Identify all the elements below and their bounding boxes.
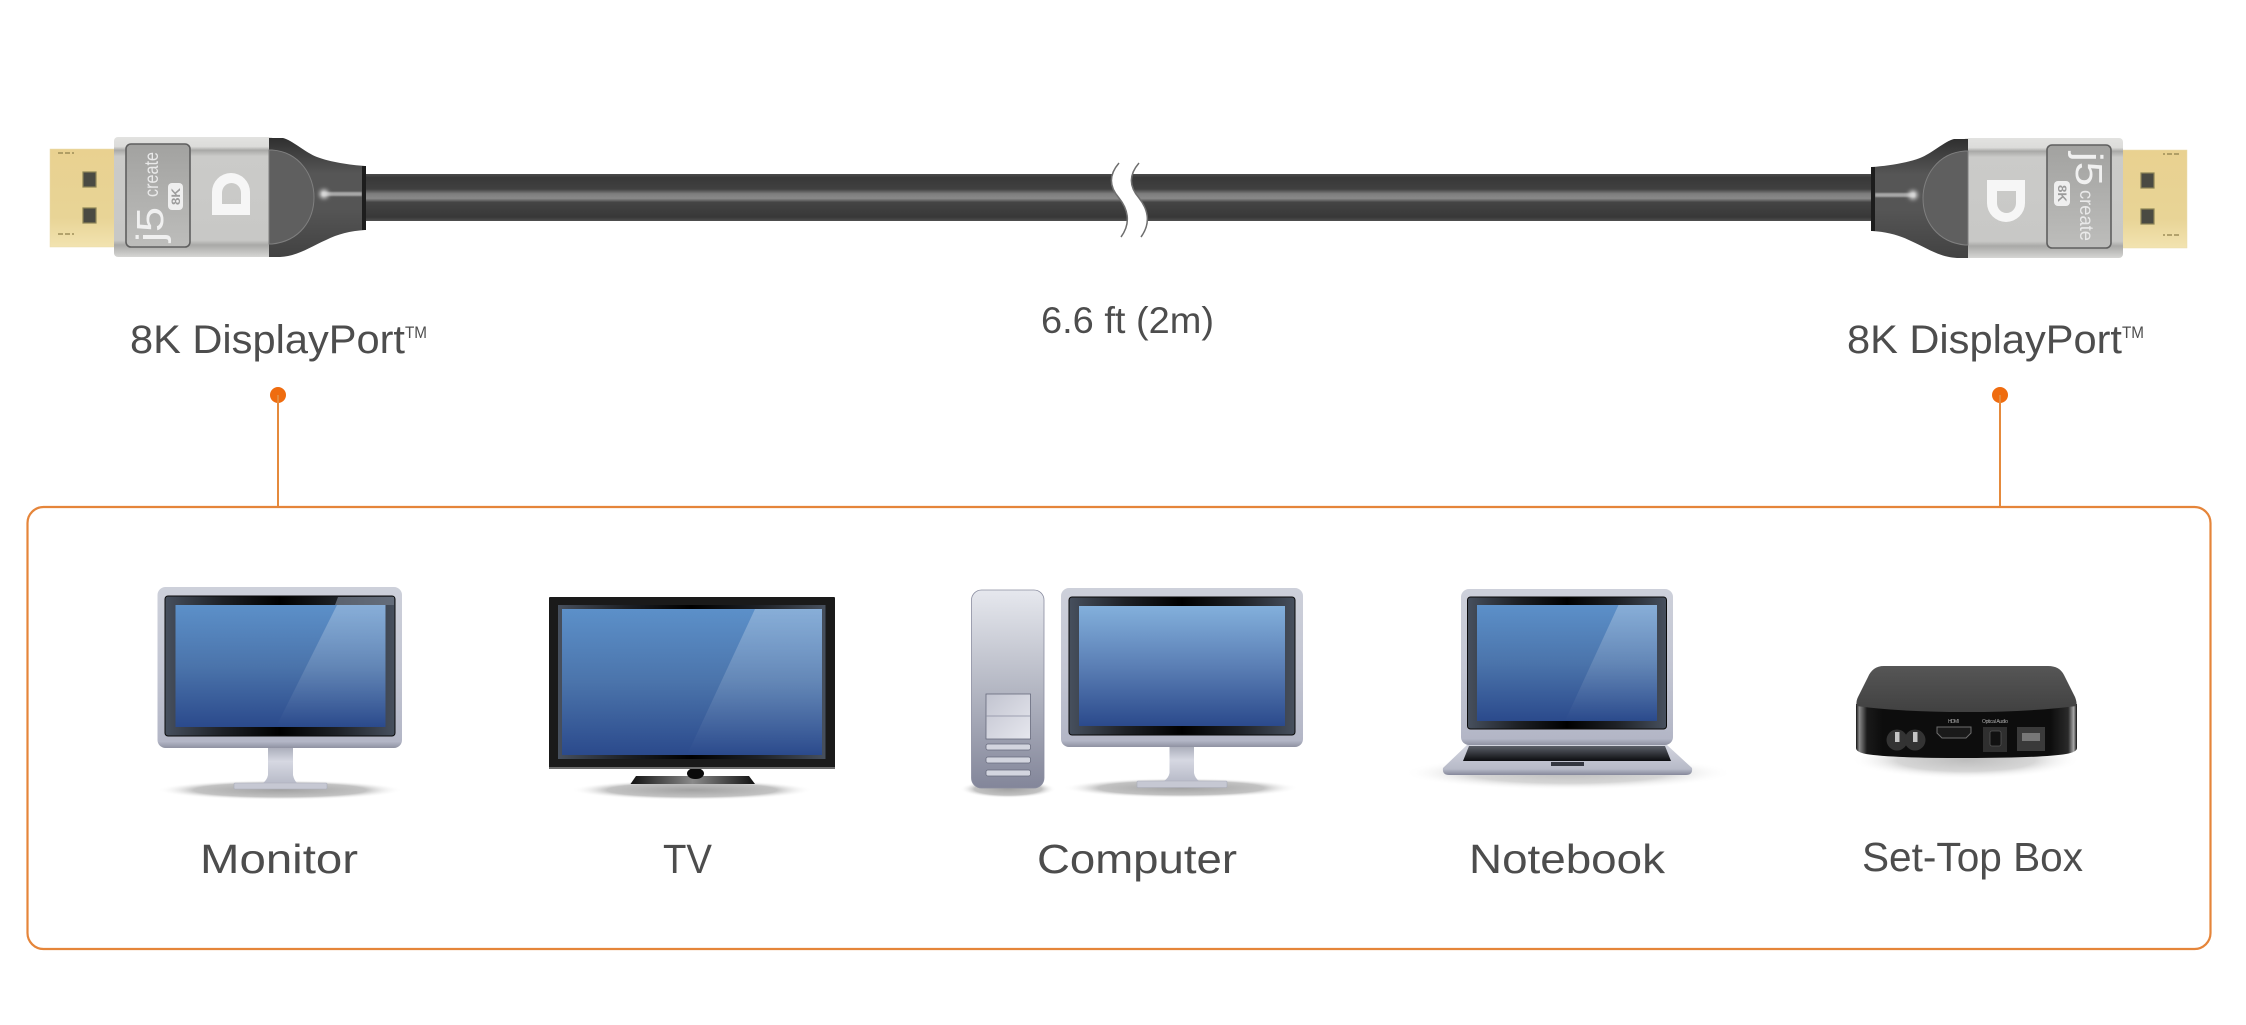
left logo text: j5	[130, 207, 172, 243]
label: set-top box: Set-Top Box	[1862, 834, 2083, 880]
left connector	[50, 137, 366, 257]
left logo text: 8K	[169, 188, 183, 205]
label: left port: TM	[405, 323, 427, 342]
label: right port: 8K DisplayPort	[1847, 318, 2122, 362]
connector: left dot and line	[270, 387, 286, 507]
connector: right dot and line	[1992, 387, 2008, 507]
right logo text: j5	[2067, 151, 2109, 186]
right connector	[1871, 138, 2187, 258]
label: left port: 8K DisplayPort	[130, 318, 405, 362]
box ports: Optical Audio	[1982, 719, 2008, 725]
cable	[360, 163, 1880, 237]
label: notebook: Notebook	[1469, 836, 1666, 882]
icon: set-top box	[1851, 666, 2081, 779]
left logo text	[130, 152, 183, 243]
icon: TV	[549, 597, 835, 800]
label: TV: TV	[663, 836, 713, 882]
label: monitor: Monitor	[200, 836, 358, 882]
icon: notebook	[1403, 589, 1733, 790]
right logo text: create	[2075, 190, 2096, 241]
tower	[960, 590, 1056, 798]
label: right port: TM	[2122, 323, 2144, 342]
label: cable length: 6.6 ft (2m)	[1041, 300, 1214, 341]
right logo text: 8K	[2055, 185, 2069, 202]
icon: DP logo left	[212, 173, 250, 215]
label: computer: Computer	[1037, 836, 1237, 882]
right logo text	[2054, 151, 2109, 241]
icon: monitor	[157, 587, 403, 800]
icon: computer	[960, 588, 1303, 798]
panel: compatible devices	[28, 507, 2210, 949]
box ports	[1886, 719, 2045, 752]
box ports: HDMI	[1948, 719, 1959, 725]
left logo text: create	[142, 152, 163, 197]
desktop display	[1061, 588, 1303, 798]
icon: DP logo right	[1987, 180, 2025, 222]
